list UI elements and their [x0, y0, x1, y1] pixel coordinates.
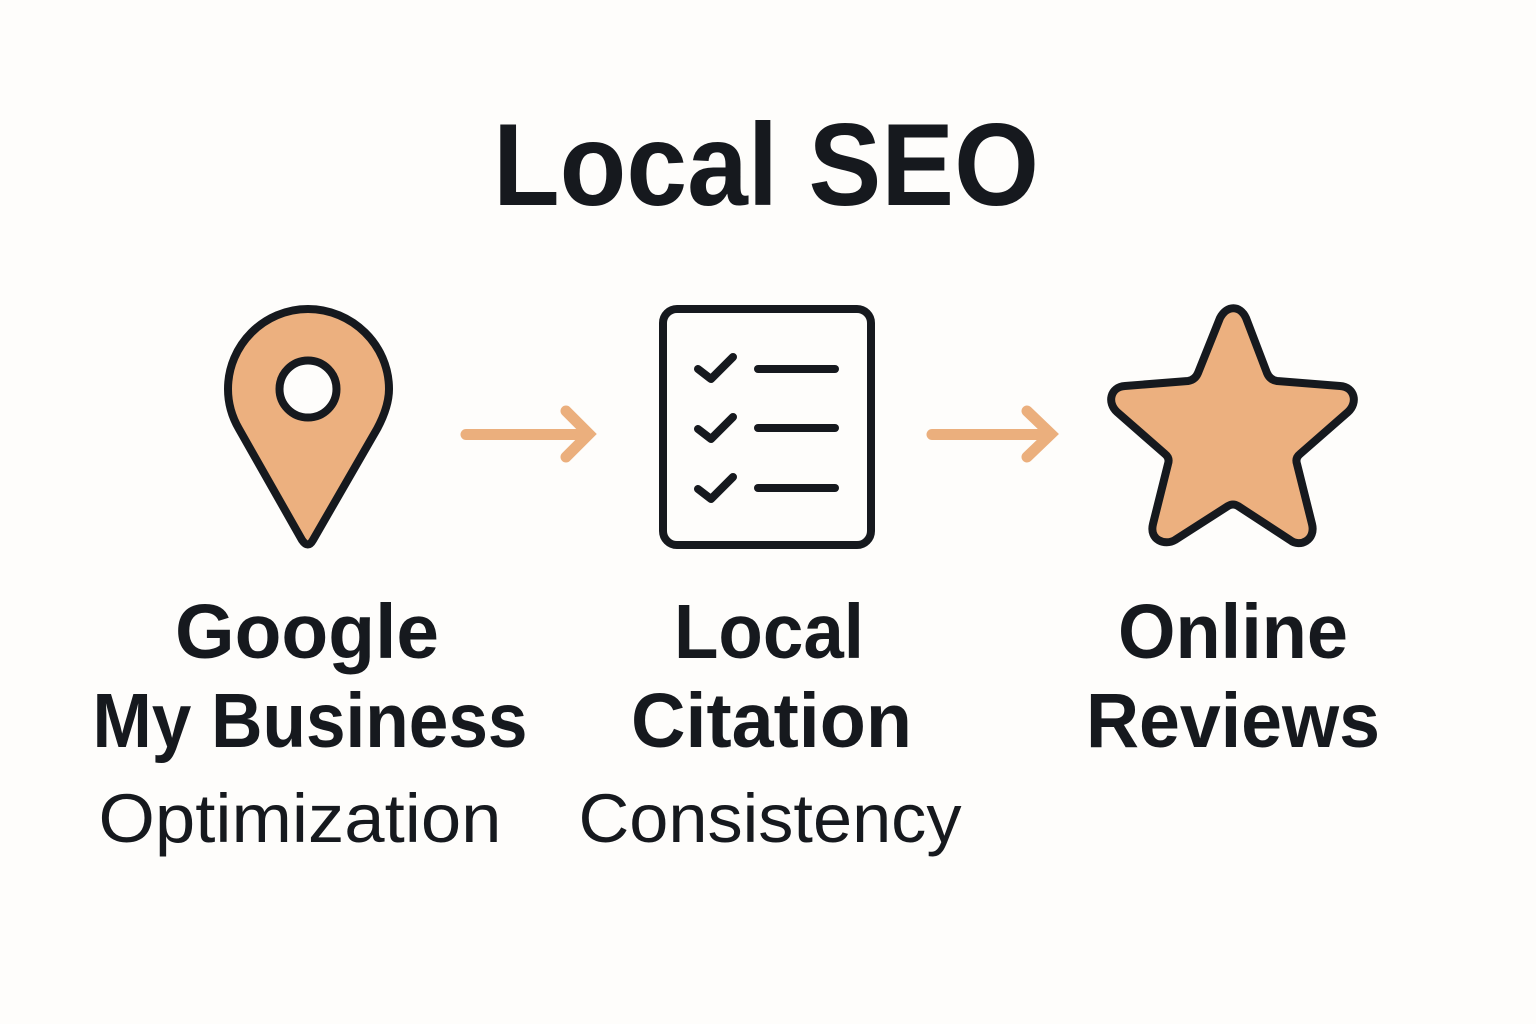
arrow: checklist to star — [932, 411, 1051, 457]
label: Google My Business Optimization — [92, 589, 528, 857]
icon: star — [1111, 308, 1354, 543]
label: Online Reviews — [1086, 589, 1380, 764]
label: Google My Business Optimization: Google — [175, 589, 439, 675]
label: Google My Business Optimization: Optimization — [98, 780, 502, 857]
label: Local Citation Consistency: Citation — [631, 678, 912, 764]
label: Local Citation Consistency: Local — [674, 589, 864, 675]
label: Google My Business Optimization: My Business — [92, 678, 528, 764]
label: Local Citation Consistency — [578, 589, 962, 857]
label: Online Reviews: Reviews — [1086, 678, 1380, 764]
title: Local SEO — [493, 99, 1039, 230]
icon: checklist — [663, 309, 871, 545]
icon: map pin — [228, 309, 389, 544]
label: Local Citation Consistency: Consistency — [578, 780, 962, 857]
arrow: pin to checklist — [466, 411, 589, 457]
label: Online Reviews: Online — [1118, 589, 1348, 675]
